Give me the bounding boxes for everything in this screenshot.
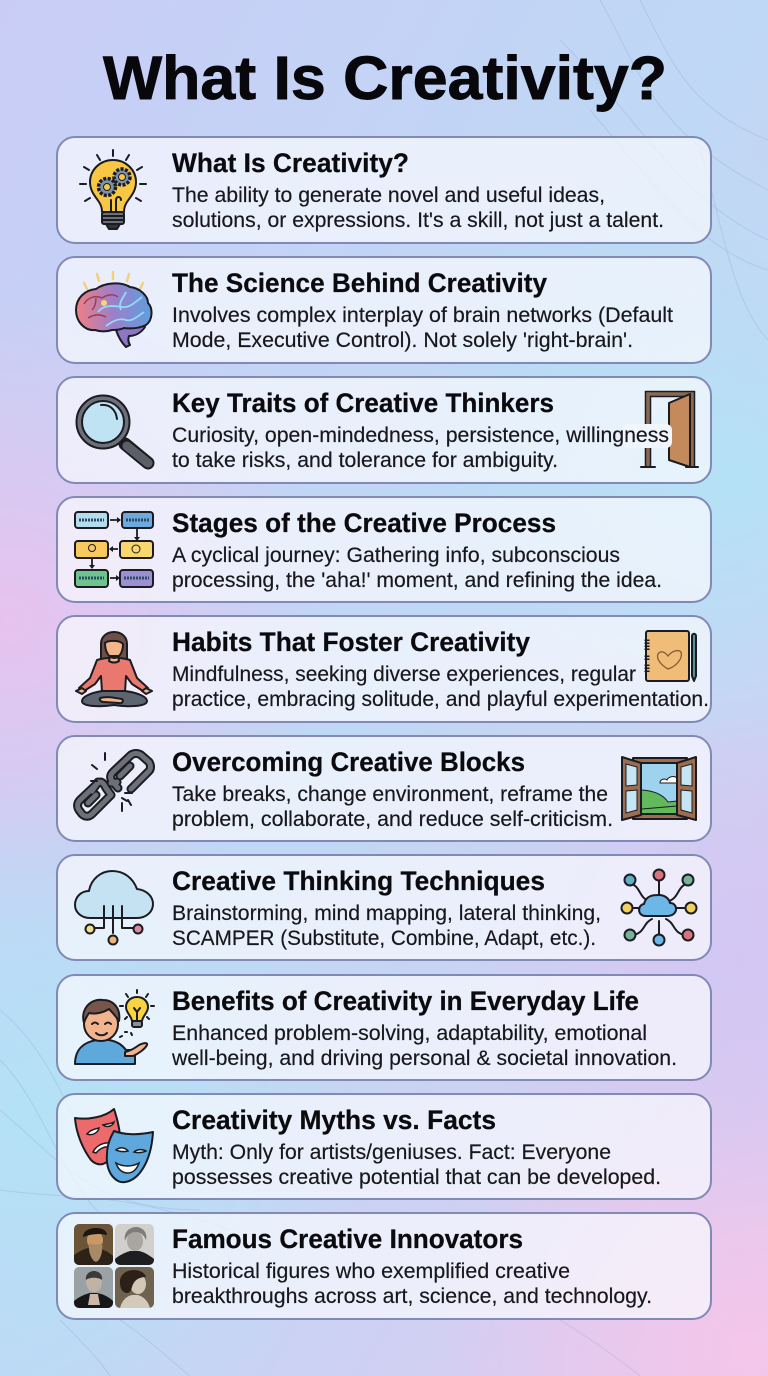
heading: Creative Thinking Techniques	[172, 866, 545, 896]
title: What Is Creativity?	[103, 44, 667, 112]
icon: portrait Lovelace	[115, 1267, 154, 1308]
text block: Brainstorming, mind mapping, lateral thinking,	[172, 902, 601, 925]
icon: open door	[641, 394, 698, 467]
icon: boy with idea bulb	[75, 990, 154, 1064]
panel: what is creativity	[57, 137, 711, 243]
icon: magnifying glass	[76, 396, 148, 463]
text block: Enhanced problem-solving, adaptability, emotional	[172, 1022, 647, 1045]
heading: The Science Behind Creativity	[172, 268, 547, 298]
text block: Involves complex interplay of brain networks (Default	[172, 304, 673, 327]
icon: process flow diagram	[75, 512, 153, 587]
heading: Famous Creative Innovators	[172, 1224, 523, 1254]
panel: blocks	[57, 736, 711, 841]
panel: myths	[57, 1094, 711, 1199]
heading: Key Traits of Creative Thinkers	[172, 388, 554, 418]
text block: Mode, Executive Control). Not solely 'right-brain'.	[172, 329, 633, 352]
text block: SCAMPER (Substitute, Combine, Adapt, etc.).	[172, 927, 596, 950]
heading: Stages of the Creative Process	[172, 508, 556, 538]
heading: Benefits of Creativity in Everyday Life	[172, 986, 639, 1016]
text block: A cyclical journey: Gathering info, subconscious	[172, 544, 620, 567]
text block: to take risks, and tolerance for ambiguity.	[172, 449, 558, 472]
icon: portrait Leonardo	[74, 1224, 113, 1265]
text block: well-being, and driving personal & societal innovation.	[171, 1047, 677, 1070]
panel: science	[57, 257, 711, 363]
heading: What Is Creativity?	[172, 148, 409, 178]
text block: Curiosity, open-mindedness, persistence, willingness	[172, 424, 669, 447]
panel: techniques	[57, 855, 711, 960]
icon: brain	[76, 272, 152, 347]
panel: key traits	[57, 377, 711, 483]
icon: portrait Curie	[115, 1224, 154, 1265]
text block: solutions, or expressions. It's a skill, not just a talent.	[172, 209, 664, 232]
icon: lightbulb with gears	[80, 150, 146, 229]
text block: Take breaks, change environment, reframe the	[172, 783, 608, 806]
text block: practice, embracing solitude, and playful experimentation.	[172, 688, 709, 711]
icon: open window	[622, 757, 696, 820]
text block: breakthroughs across art, science, and technology.	[172, 1285, 652, 1308]
heading: Overcoming Creative Blocks	[172, 747, 525, 777]
panel: stages	[57, 497, 711, 602]
icon: network cloud	[622, 870, 696, 946]
icon: meditating person	[76, 632, 152, 706]
heading: Habits That Foster Creativity	[172, 627, 530, 657]
text block: Myth: Only for artists/geniuses. Fact: Everyone	[172, 1141, 611, 1164]
icon: broken chain	[78, 753, 150, 816]
icon: idea cloud	[75, 871, 153, 944]
icon: notebook and pen	[646, 631, 696, 681]
text block: The ability to generate novel and useful ideas,	[172, 184, 605, 207]
icon: theatre masks	[75, 1109, 153, 1182]
text halo	[622, 424, 672, 448]
panel: benefits	[57, 975, 711, 1080]
panel: innovators	[57, 1213, 711, 1319]
heading: Creativity Myths vs. Facts	[172, 1105, 496, 1135]
text block: Historical figures who exemplified creative	[172, 1260, 570, 1283]
text block: Mindfulness, seeking diverse experiences, regular	[172, 663, 636, 686]
text block: possesses creative potential that can be developed.	[172, 1166, 661, 1189]
text block: problem, collaborate, and reduce self-criticism.	[172, 808, 613, 831]
icon: portrait Jobs	[74, 1267, 113, 1308]
panel: habits	[57, 616, 711, 722]
text block: processing, the 'aha!' moment, and refining the idea.	[172, 569, 662, 592]
